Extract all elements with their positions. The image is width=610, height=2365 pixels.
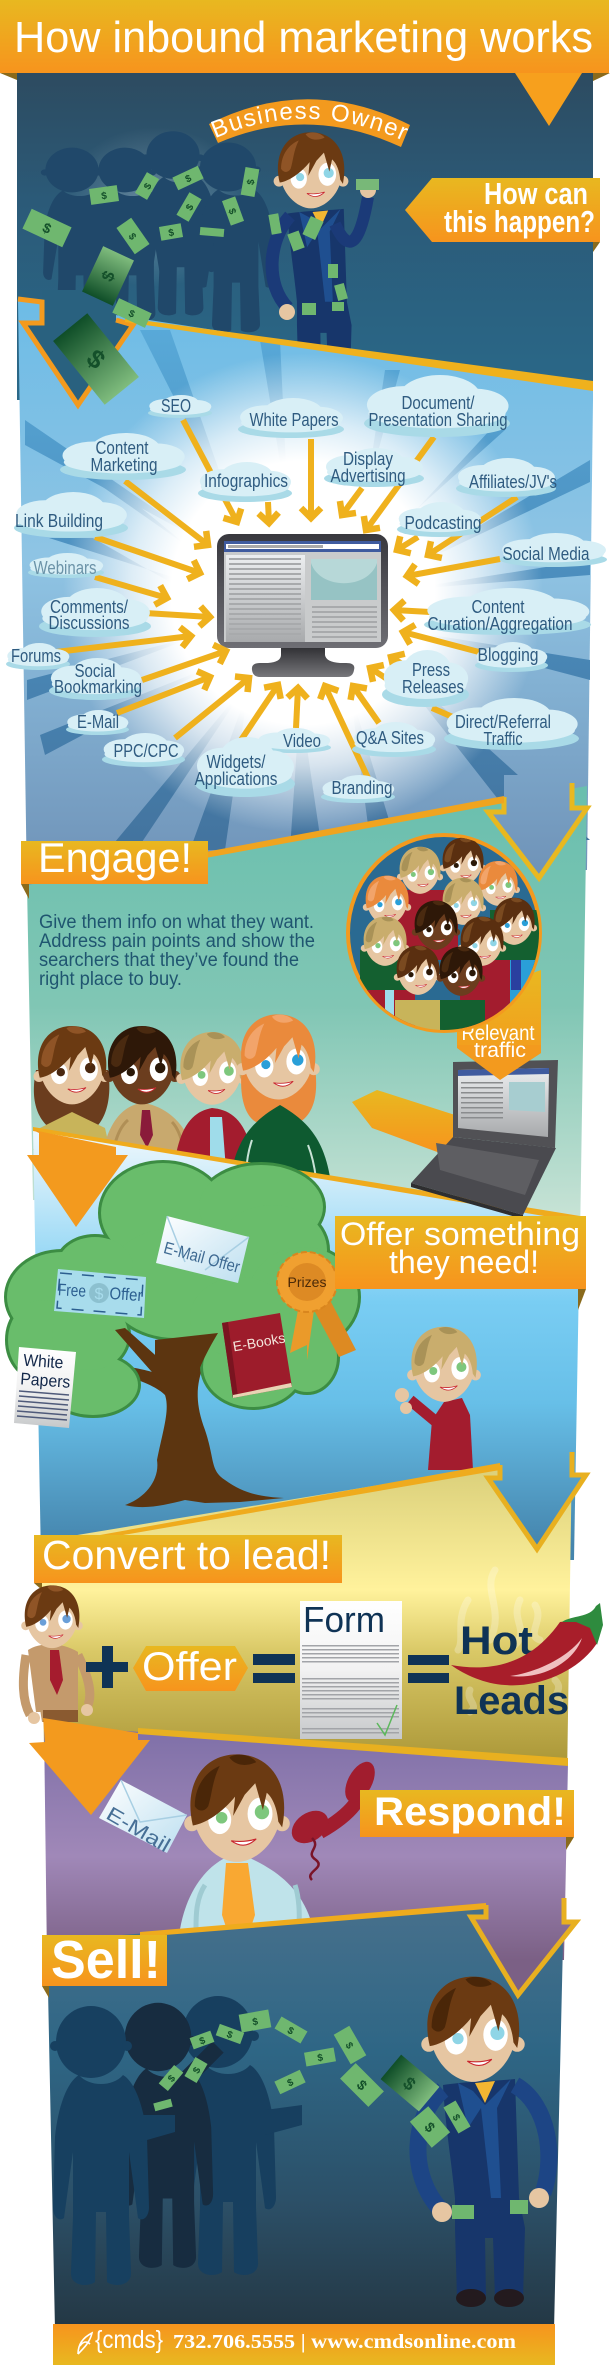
cloud: Infographics: Infographics [204,471,288,491]
man with tie [178,1754,316,1945]
panel: traffic sources background [18,300,593,890]
cloud: SEO: SEO [161,396,191,416]
falling money bills: $ [81,343,112,375]
cloud: Webinars: Webinars [34,558,96,578]
cloud: Link Building: Link Building [15,511,103,531]
cloud: White Papers [238,398,344,438]
business owner figure [268,132,379,380]
equals sign [253,1654,295,1683]
free offer coupon: $ [95,1286,104,1303]
cloud: Forums [6,643,70,670]
silhouettes of crowd [41,131,274,332]
cloud: Branding: Branding [332,778,392,798]
e-books book [222,1313,292,1398]
relevant traffic tag [457,970,541,1080]
arrow: Q&A [353,686,379,723]
cloud: PPC [102,733,185,767]
monitor [217,534,388,677]
cloud: Video: Video [283,731,321,751]
respond banner: Respond! [374,1790,566,1834]
e-mail envelope: E-Mail [102,1803,174,1857]
blond boy [395,1327,481,1470]
free offer coupon [54,1269,146,1318]
engage paragraph: Give them info on what they want. [39,912,314,933]
cloud: Affiliates [456,458,557,497]
arrow: branding [325,686,368,778]
cloud: Widgets: Widgets/ [206,752,266,772]
cloud: Forums: Forums [11,646,61,666]
falling money bills: $ [168,228,175,239]
cloud: Content Marketing: Marketing [90,455,158,475]
canopy outline [7,1163,358,1415]
arrow from respond into sell [471,1880,576,1995]
telephone handset [286,1757,381,1880]
arrow: display advertising [342,488,362,515]
divider line [125,318,593,391]
cloud: E-Mail: E-Mail [77,712,119,732]
cloud: White Papers: White Papers [250,410,338,430]
equals sign [408,1655,449,1683]
arrow: social bookmarking [142,651,226,680]
cloud: Display Advertising [324,448,424,487]
panel: business owner background [17,73,593,400]
arrow: social media [407,559,500,576]
cloud: Social Bookmarking [49,658,142,700]
panel: respond background [44,1725,568,1960]
cloud: Podcasting: Podcasting [404,513,482,533]
offer hexagon: Offer [142,1645,237,1689]
cloud: Link Building [14,492,128,538]
arrow: direct traffic [391,657,412,670]
engage paragraph: searchers that they’ve found the [39,950,299,971]
cloud: Direct Referral: Traffic [484,729,522,749]
crowd circle [348,835,545,1040]
white glow around monitor [63,353,543,833]
arrow: video [296,688,298,728]
cloud: SEO [148,395,212,418]
cloud: Direct Referral [444,698,579,750]
cloud: Blogging: Blogging [478,645,538,665]
title: How inbound marketing works [14,13,593,62]
flying money bills: $ [198,2035,207,2048]
divider line [33,1127,580,1222]
free offer coupon: Free [57,1280,86,1301]
trunk [95,1328,284,1507]
arrow from offer into convert [488,1440,586,1549]
business owner with money [418,1977,549,2307]
white papers sheet: White [23,1351,64,1372]
arrow: forums [56,636,191,652]
form document [300,1599,402,1739]
cloud: Widgets [194,737,295,797]
cloud: Comments [39,588,151,637]
hot leads text: Leads [454,1679,569,1723]
flying money bills: $ [399,2073,420,2095]
divider line [100,1463,500,1539]
prizes ribbon [277,1252,356,1360]
header banner [0,0,610,81]
arrow: comments [145,613,210,617]
footer bar [53,2324,555,2365]
form document: Form [303,1599,385,1640]
cloud: Content Curation: Curation/Aggregation [428,614,572,634]
flying money bills: $ [252,2017,259,2028]
arrow: blogging [403,632,479,652]
steam [458,1570,560,1712]
sell banner: Sell! [51,1930,161,1990]
falling money bills [22,166,259,405]
arrow: content marketing [125,481,208,545]
cloud: Video [257,728,331,753]
arrow: white papers [308,439,314,518]
cloud: Press Releases [382,650,469,707]
cloud: Press Releases: Releases [402,677,464,697]
white papers sheet: Papers [20,1369,71,1392]
divider line [138,1728,568,1766]
cloud: Display Advertising: Display [343,449,393,469]
footer bar: 732.706.5555 | www.cmdsonline.com [173,2331,516,2353]
cloud: PPC: PPC/CPC [114,741,179,761]
e-books book: E-Books [232,1330,286,1354]
direct traffic arrow stub [432,708,455,718]
falling money bills: $ [184,202,197,213]
flying money bills: $ [225,2029,234,2042]
engage banner [21,834,208,899]
relevant traffic arrow tip over laptop [457,1039,541,1080]
flying money bills: $ [343,2041,355,2051]
falling money bills: $ [246,178,257,186]
offer banner: Offer something [340,1216,580,1252]
prizes ribbon: Prizes [288,1274,326,1290]
flying money bills [153,2010,471,2148]
chili pepper [451,1603,603,1685]
flying money bills: $ [285,2025,296,2038]
cloud: Press Releases: Press [412,660,450,680]
arrow: affiliates [428,497,517,555]
business owner arc banner: Business Owner [210,104,408,140]
arrow: SEO [183,420,237,522]
cloud: Blogging [475,642,548,672]
arrow: content curation [394,610,430,612]
flying money bills: $ [191,2065,204,2076]
panel: convert background [41,1453,572,1780]
cloud: Social Bookmarking: Social [74,661,116,681]
arrow: infographics [268,502,269,523]
cloud: Social Bookmarking: Bookmarking [54,677,142,697]
cloud: Display Advertising: Advertising [330,466,406,486]
arrows from traffic sources to monitor [56,420,517,778]
hot leads text [454,1619,569,1723]
flying money bills: $ [286,2077,296,2090]
cloud: Document sharing: Document/ [402,393,474,413]
arrow: document sharing [366,437,434,530]
arrow: PPC [175,678,249,738]
cloud: Direct Referral: Direct/Referral [455,712,551,732]
header pointer [515,73,582,126]
arrow from engage into offer [27,1130,128,1227]
cloud: Content Marketing [60,433,186,480]
falling money bills: $ [184,173,194,186]
arrow: webinars [95,577,167,598]
cloud: Affiliates: Affiliates/JV's [469,472,557,492]
group of four people [33,1014,333,1220]
hot leads text: Hot [460,1619,533,1663]
cloud: Podcasting [397,502,482,537]
sunburst rays [25,330,590,860]
cloud: Comments: Discussions [48,613,130,633]
cloud: Document sharing: Presentation Sharing [368,410,508,430]
plus sign [86,1646,128,1688]
arrow from panel one into panel two [18,290,133,405]
divider line [200,796,504,859]
arrow: podcasting [397,537,418,550]
footer bar: {cmds} [95,2326,163,2354]
man in equation [21,1585,93,1724]
falling money bills: $ [101,191,108,202]
cloud: Content Curation: Content [472,597,524,617]
e-mail offer envelope: E-Mail Offer [162,1238,242,1277]
flying money bills: $ [421,2119,439,2135]
glow behind silhouettes [60,127,250,287]
buyer silhouettes [50,1996,302,2285]
arrow: e-mail [117,677,210,713]
flying money bills: $ [354,2077,371,2094]
arrow: link building [95,537,200,573]
cloud: Content Curation [424,588,591,635]
flying money bills: $ [166,2073,178,2085]
engage paragraph [39,912,315,990]
tree [7,1163,358,1507]
arrow from traffic panel into engage panel [488,775,587,880]
relevant traffic arrow tip over laptop: traffic [474,1039,526,1062]
engage paragraph: Address pain points and show the [39,931,315,952]
cloud: Widgets: Applications [194,769,278,789]
cloud: Comments: Comments/ [50,597,128,617]
falling money bills: $ [225,207,238,216]
panel: sell background [47,1899,564,2330]
e-mail envelope [99,1780,187,1857]
engage paragraph: right place to buy. [39,969,182,990]
white papers sheet [14,1347,76,1428]
cloud: Q&A Sites: Q&A Sites [356,728,424,748]
flying money bills: $ [450,2113,462,2123]
falling money bills: $ [126,231,138,243]
respond banner [360,1790,574,1850]
falling money bills: $ [40,219,54,237]
arrow: widgets [241,685,278,740]
free offer coupon: Offer [109,1284,143,1305]
flying money bills: $ [317,2053,324,2064]
falling money bills: $ [127,308,137,321]
cloud: Social Media: Social Media [502,544,590,564]
cloud: Infographics [198,462,292,502]
cloud: Social Media [500,533,607,567]
arrow from convert into respond [29,1718,150,1815]
laptop [411,1060,558,1219]
divider line [140,1903,486,1937]
cloud: Branding [321,775,395,803]
cloud: E-Mail [66,710,129,735]
offer banner [335,1216,586,1310]
relevant traffic tag: Relevant [462,1022,535,1045]
engage banner: Engage! [38,834,192,881]
convert banner: Convert to lead! [42,1532,331,1578]
arrow from laptop [352,1090,455,1153]
arrow: press releases [370,668,401,688]
e-mail offer envelope [156,1216,249,1283]
falling money bills: $ [142,181,155,192]
panel: offer background [33,1130,580,1560]
offer banner: they need! [389,1244,539,1280]
how can this happen banner [405,176,600,252]
cloud: Document sharing [364,375,510,437]
panel: engage background [27,786,587,1240]
falling money bills: $ [98,267,119,285]
how can this happen banner: How can [484,176,588,211]
cloud: Content Marketing: Content [96,438,148,458]
cloud: Q&A Sites [352,722,436,757]
